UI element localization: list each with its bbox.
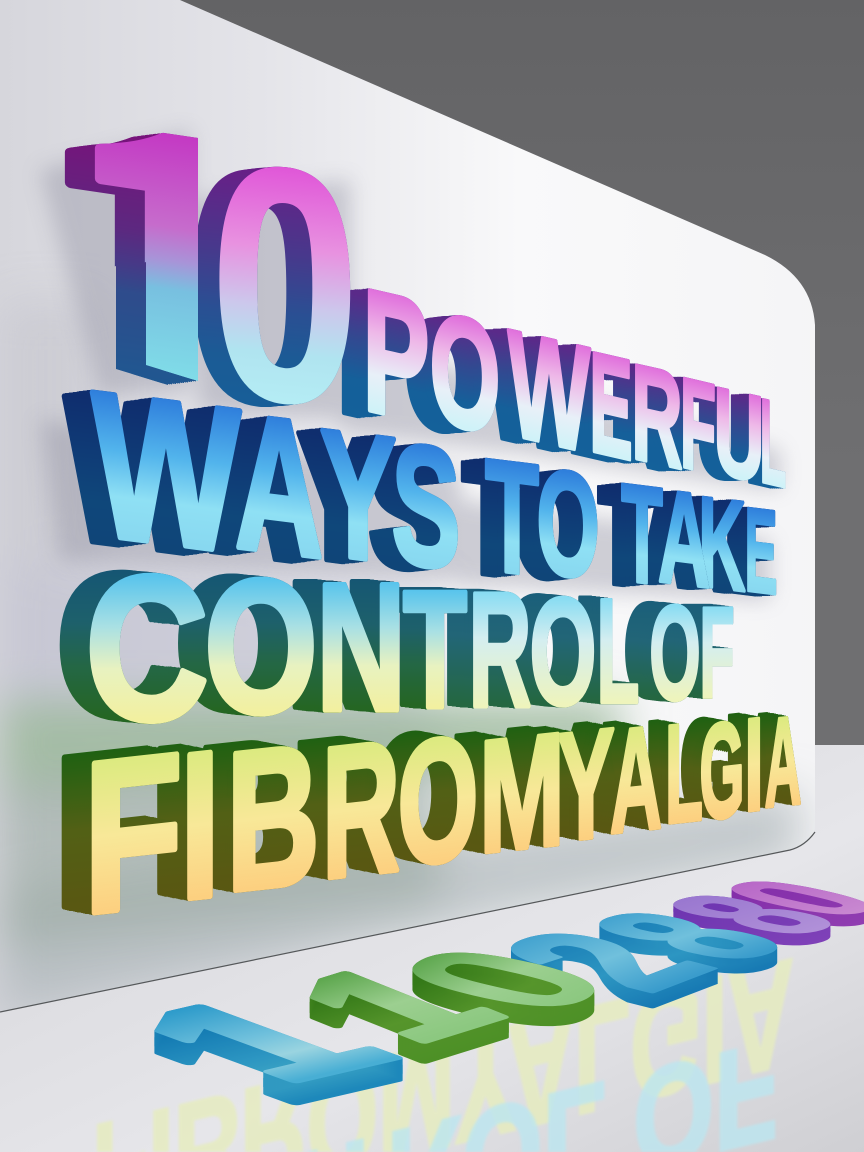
line: WAYS TO TAKE: W (92, 348, 240, 596)
line: FIBROMYALGIA: O (398, 698, 478, 903)
line: WAYS TO TAKE: A (658, 462, 710, 616)
line: CONTROL OF, left part: T (403, 556, 467, 743)
line: WAYS TO TAKE: Y (320, 391, 396, 601)
wall shading (0, 300, 800, 1020)
line: FIBROMYALGIA: M (479, 698, 565, 887)
line: CONTROL OF (469, 559, 734, 741)
line: POWERFUL: E (589, 322, 633, 491)
wall bottom edge (0, 832, 815, 1012)
line: FIBROMYALGIA: A (765, 690, 801, 835)
line: POWERFUL (363, 253, 786, 514)
floor digits (71, 869, 864, 1102)
line: FIBROMYALGIA: I (744, 690, 764, 840)
line: POWERFUL: F (680, 351, 716, 502)
line: CONTROL OF, left part (85, 534, 467, 764)
digit 1 blue: 1 (71, 979, 450, 1102)
line: FIBROMYALGIA: Y (557, 697, 615, 874)
line: WAYS TO TAKE: A (235, 374, 323, 599)
numeral 0: 0 (209, 91, 361, 481)
line: CONTROL OF: L (597, 568, 639, 734)
line: CONTROL OF: F (700, 582, 734, 725)
reflection: fibromyalgia (96, 958, 794, 1152)
reflection: control of (309, 1048, 776, 1152)
line: WAYS TO TAKE: S (392, 406, 460, 606)
line: WAYS TO TAKE (92, 348, 777, 620)
line: FIBROMYALGIA (83, 690, 801, 960)
line: CONTROL OF: R (469, 559, 531, 741)
digit 2 blue: 2 (443, 915, 767, 1006)
line: WAYS TO TAKE: O (536, 439, 600, 611)
line: POWERFUL: O (430, 279, 500, 469)
line: FIBROMYALGIA: I (180, 708, 220, 944)
line: FIBROMYALGIA: R (322, 702, 400, 919)
line: WAYS TO TAKE: E (745, 484, 777, 620)
dark backdrop (0, 0, 864, 750)
line: POWERFUL: R (631, 335, 683, 497)
digit 8 blue: 8 (539, 898, 839, 974)
line: POWERFUL: U (714, 362, 764, 510)
digit 1 green: 1 (243, 948, 548, 1061)
line: WAYS TO TAKE: T (621, 455, 663, 615)
digit 0 green: 0 (341, 931, 667, 1028)
headline (61, 0, 801, 960)
line: FIBROMYALGIA: L (665, 692, 703, 853)
line: CONTROL OF, left part: N (316, 545, 406, 749)
reflective floor (0, 745, 864, 1152)
line: FIBROMYALGIA: G (699, 694, 745, 849)
line: CONTROL OF: O (530, 567, 596, 737)
line: FIBROMYALGIA: A (610, 694, 662, 865)
line: CONTROL OF, left part: O (204, 540, 318, 752)
letter shadows (40, 130, 780, 600)
line: CONTROL OF, left part: C (85, 534, 209, 764)
line: FIBROMYALGIA: F (83, 707, 183, 960)
line: WAYS TO TAKE: T (485, 427, 539, 610)
line: WAYS TO TAKE: K (699, 469, 745, 619)
line: POWERFUL: L (760, 375, 786, 514)
line: CONTROL OF: O (649, 578, 701, 728)
line: FIBROMYALGIA: B (226, 702, 320, 934)
line: POWERFUL: P (363, 253, 429, 461)
line: POWERFUL: W (508, 299, 590, 485)
